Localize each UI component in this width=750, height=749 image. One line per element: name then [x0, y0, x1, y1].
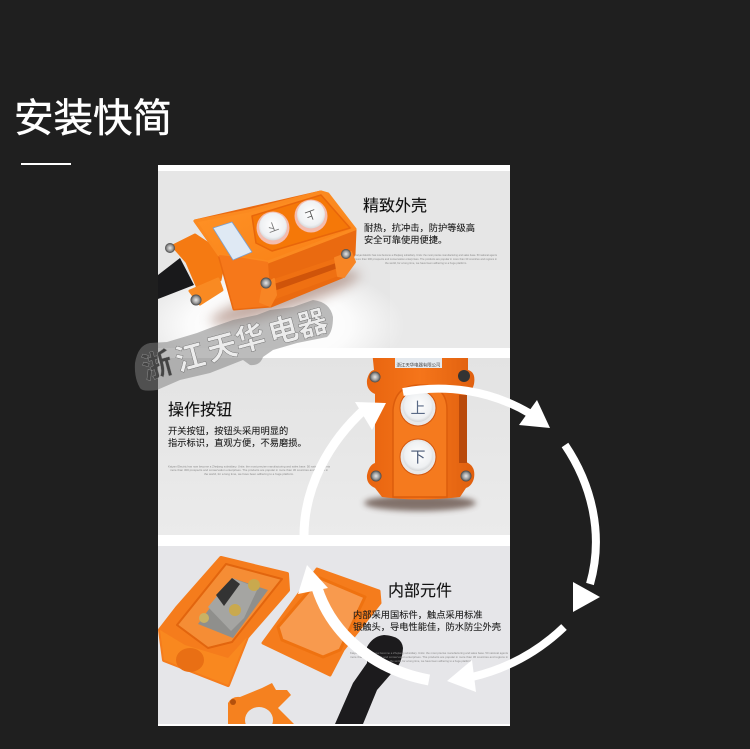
- nameplate: [213, 222, 252, 260]
- orange control box: [367, 350, 474, 500]
- description: 指示标识，直观方便，不易磨损。: [168, 437, 307, 448]
- fine print: more than 300 prospects and conservation enterprises. The products are popular in more than 30 countries and regions in: [350, 655, 509, 659]
- nameplate: 浙江天华电器有限公司: [397, 362, 440, 368]
- fine print: the world, for a long time, we have been adhering to a huge platform.: [390, 659, 472, 663]
- fine print: the world, for a long time, we have been adhering to a huge platform.: [204, 472, 294, 476]
- nameplate: [395, 358, 442, 368]
- fine print: [355, 254, 497, 264]
- icon: black cable: [158, 258, 194, 299]
- description: 耐热，抗冲击，防护等级高: [364, 222, 475, 233]
- heading: 内部元件: [388, 582, 452, 600]
- fine print: more than 300 prospects and conservation enterprises. The products are popular in more than 30 countries and regions in: [355, 257, 498, 261]
- watermark: 华: [232, 320, 269, 359]
- open box base: [160, 558, 288, 685]
- button: up: [400, 390, 436, 426]
- screws: [165, 243, 351, 306]
- orange control box: [173, 192, 355, 309]
- switch block: [198, 578, 268, 638]
- arrow: left arc to top: [304, 402, 386, 536]
- heading: 操作按钮: [168, 401, 232, 419]
- button: down: [400, 439, 436, 475]
- description: 银触头，导电性能佳，防水防尘外壳: [353, 621, 501, 632]
- description: [168, 426, 301, 448]
- fine print: Kaiyan Electric has now become a Zhejiang subsidiary. Units: the most precise manufacturing and sales base. 50 national agents: [168, 464, 331, 468]
- button: down: [256, 212, 290, 244]
- heading: 精致外壳: [363, 197, 427, 215]
- clamp: [228, 683, 294, 724]
- watermark: 电: [265, 312, 302, 351]
- open box lid: [263, 569, 380, 675]
- panel: 内部元件: [158, 546, 510, 733]
- button: down: 下: [265, 219, 280, 234]
- panel: 精致外壳: [158, 171, 510, 348]
- arrow: lower right arc: [447, 627, 564, 692]
- title underline: [21, 163, 71, 165]
- description: 内部采用国标件，触点采用标准: [353, 609, 482, 620]
- fine print: Kaiyan Electric has now become a Zhejiang subsidiary. Units: the most precise manufacturing and sales base. 50 national agents: [350, 651, 509, 655]
- fine print: the world, for a long time, we have been adhering to a huge platform.: [385, 261, 467, 265]
- arrow: right arc: [565, 445, 600, 612]
- watermark: 江: [172, 339, 209, 378]
- button: up: [294, 200, 328, 232]
- watermark: [135, 300, 333, 391]
- cycle arrows: [298, 389, 600, 692]
- panel: product card: [135, 165, 510, 733]
- fine print: more than 300 prospects and conservation enterprises. The products are popular in more than 30 countries and regions in: [170, 468, 329, 472]
- arrow: lower left arc: [298, 565, 429, 680]
- button: up: 上: [303, 207, 318, 223]
- description: 开关按钮，按钮头采用明显的: [168, 425, 288, 436]
- button: down: 下: [410, 449, 426, 466]
- description: 安全可靠使用便捷。: [364, 234, 447, 245]
- panel: 操作按钮: [158, 350, 510, 535]
- screws: [370, 370, 472, 482]
- watermark: 器: [294, 305, 331, 344]
- watermark: 天: [204, 329, 241, 368]
- description: [353, 609, 501, 632]
- rubber cable boot: [335, 635, 403, 724]
- fine print: [168, 466, 330, 476]
- watermark: 浙: [139, 347, 176, 386]
- fine print: [350, 652, 508, 662]
- button: up: 上: [410, 400, 426, 417]
- description: [364, 222, 475, 245]
- title: 安装快简: [14, 97, 172, 141]
- fine print: Kaiyan Electric has now become a Zhejiang subsidiary. Units: the most precise manufacturing and sales base. 50 national agents: [355, 253, 498, 257]
- arrow: top arc: [403, 389, 550, 428]
